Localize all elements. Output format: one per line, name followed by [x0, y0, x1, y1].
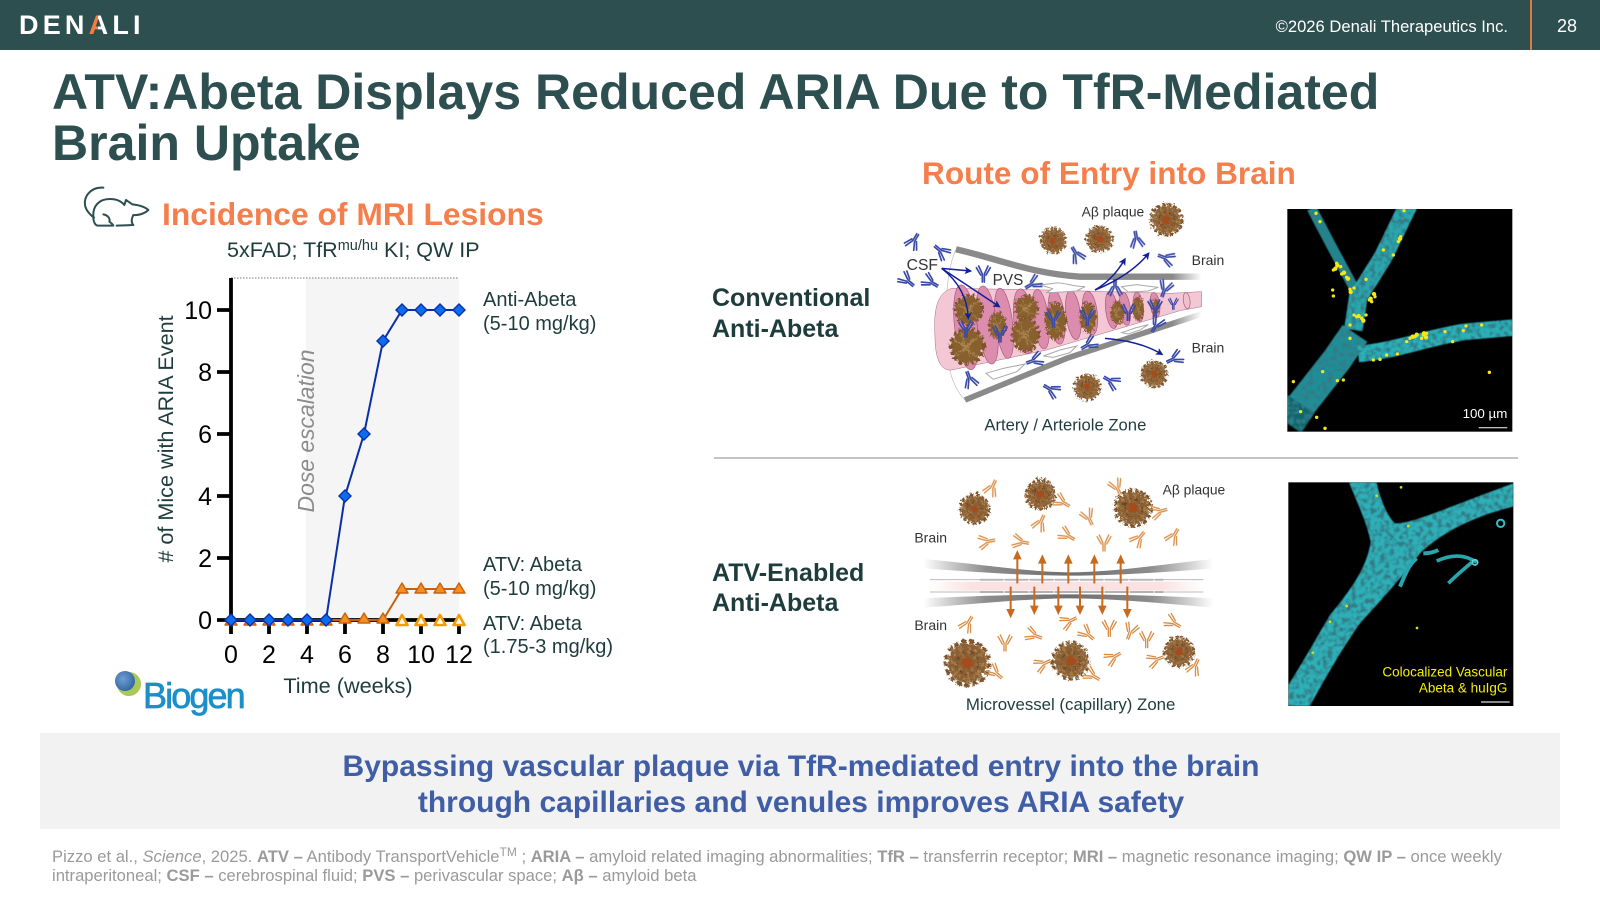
chart subtitle: KI; QW IP: [378, 238, 480, 262]
page number: 28: [1557, 16, 1577, 36]
colocalization caption: Colocalized Vascular: [1382, 664, 1507, 679]
label: conventional anti-abeta: Conventional: [712, 284, 870, 312]
footnote: ARIA – amyloid related imaging abnormalities; TfR – transferrin receptor; MRI – magnetic resonance imaging; QW IP – once weekly: [531, 847, 1502, 866]
series labels: ATV: Abeta: [483, 554, 583, 576]
line chart: MRI lesions: [153, 278, 473, 698]
footnote: Pizzo et al., Science, 2025. ATV – Antibody TransportVehicle: [52, 847, 500, 866]
arrows: [1006, 550, 1132, 618]
label: ATV-enabled anti-abeta: Anti-Abeta: [712, 589, 839, 617]
copyright: ©2026 Denali Therapeutics Inc.: [1276, 17, 1508, 36]
diagram labels: Aβ plaque: [1082, 204, 1145, 220]
footnote: CSF – cerebrospinal fluid; PVS – perivascular space; Aβ – amyloid beta: [166, 866, 696, 885]
heading: incidence of MRI lesions: Incidence of MRI Lesions: [162, 196, 544, 232]
label: ATV-enabled anti-abeta: ATV-Enabled: [712, 559, 864, 587]
vascular plaque: [949, 294, 1159, 363]
series labels: ATV: Abeta: [483, 613, 583, 635]
diagram labels: [914, 481, 1226, 633]
x tick labels: 2: [262, 641, 276, 669]
series: Anti-Abeta: [225, 304, 465, 626]
footnote: ;: [517, 847, 531, 866]
series labels: (5-10 mg/kg): [483, 313, 596, 335]
series labels: (5-10 mg/kg): [483, 578, 596, 600]
antibodies: [958, 477, 1204, 685]
x axis title: Time (weeks): [283, 673, 413, 698]
y tick labels: 10: [184, 297, 212, 325]
scale label: 100 µm: [1463, 406, 1507, 421]
zone caption: Microvessel (capillary) Zone: [966, 695, 1175, 714]
series labels: [483, 289, 613, 658]
divider: [714, 457, 1518, 459]
series: ATV Abeta 1.75-3: [396, 615, 464, 625]
perivascular cells: [986, 283, 1158, 379]
y tick labels: [184, 297, 212, 635]
title: ATV:Abeta Displays Reduced ARIA Due to TfR-Mediated: [52, 64, 1379, 120]
antibodies: [897, 230, 1185, 400]
axes: [217, 278, 459, 634]
diagram labels: PVS: [993, 272, 1023, 289]
series labels: (1.75-3 mg/kg): [483, 636, 613, 658]
zone caption: Artery / Arteriole Zone: [984, 416, 1146, 435]
x tick labels: [224, 641, 473, 669]
y axis title: # of Mice with ARIA Event: [153, 315, 178, 563]
diagram labels: Brain: [1192, 252, 1224, 268]
logo: Biogen: Biogen: [143, 675, 244, 716]
x tick labels: 6: [338, 641, 352, 669]
y tick labels: 6: [198, 421, 212, 449]
diagram: microvessel zone: [914, 477, 1226, 714]
chart subtitle: 5xFAD; TfR: [227, 238, 338, 262]
y tick labels: 0: [198, 607, 212, 635]
plaques: [944, 479, 1192, 683]
diagram labels: [907, 204, 1224, 355]
plaques: [1039, 203, 1180, 399]
footnote: intraperitoneal;: [52, 866, 166, 885]
capillary: [923, 559, 1213, 608]
diagram labels: Brain: [914, 617, 947, 633]
x tick labels: 0: [224, 641, 238, 669]
x tick labels: 8: [376, 641, 390, 669]
heading: route of entry: Route of Entry into Brain: [922, 155, 1296, 191]
title: Brain Uptake: [52, 115, 361, 171]
label: conventional anti-abeta: Anti-Abeta: [712, 315, 839, 343]
arrows: [942, 253, 1162, 354]
y tick labels: 4: [198, 483, 212, 511]
dose escalation label: Dose escalation: [293, 350, 319, 512]
chart subtitle: mu/hu: [338, 238, 378, 254]
y tick labels: 8: [198, 359, 212, 387]
vessel: [935, 288, 1202, 370]
takeaway band: through capillaries and venules improves ARIA safety: [418, 786, 1184, 819]
microscopy image: ATV-enabled: [1288, 482, 1513, 706]
diagram labels: Brain: [914, 529, 947, 545]
microscopy image: conventional: [1287, 205, 1517, 432]
takeaway band: Bypassing vascular plaque via TfR-mediated entry into the brain: [343, 750, 1259, 783]
x tick labels: 12: [445, 641, 473, 669]
takeaway band: [40, 733, 1560, 829]
x tick labels: 4: [300, 641, 314, 669]
colocalization caption: Abeta & huIgG: [1419, 680, 1507, 695]
diagram labels: Aβ plaque: [1163, 481, 1226, 497]
y tick labels: 2: [198, 545, 212, 573]
diagram labels: CSF: [907, 257, 938, 274]
logo: Denali: DENALI: [19, 10, 145, 40]
header bar: [0, 0, 1600, 50]
icon: mouse: [85, 188, 148, 226]
x tick labels: 10: [407, 641, 435, 669]
diagram labels: Brain: [1192, 339, 1224, 355]
series labels: Anti-Abeta: [483, 289, 577, 311]
diagram: artery zone: [897, 203, 1224, 435]
footnote: TM: [500, 845, 517, 859]
series: ATV Abeta 5-10: [225, 583, 465, 625]
